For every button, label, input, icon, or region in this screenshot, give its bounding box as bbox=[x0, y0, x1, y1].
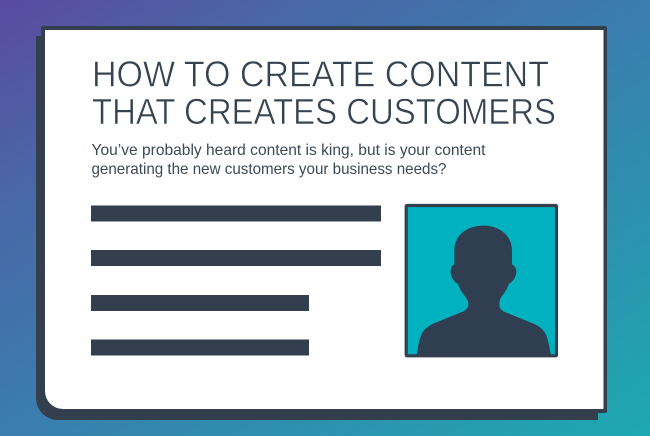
title bbox=[92, 54, 556, 132]
subtitle line 2: generating the new customers your business needs? bbox=[92, 161, 447, 178]
title line 2: THAT CREATES CUSTOMERS bbox=[92, 91, 556, 132]
subtitle line 1: You’ve probably heard content is king, but is your content bbox=[92, 142, 486, 159]
card border bbox=[41, 26, 607, 413]
subtitle bbox=[92, 142, 486, 178]
photo frame bbox=[406, 206, 556, 356]
bar 3 bbox=[91, 295, 309, 311]
title line 1: HOW TO CREATE CONTENT bbox=[92, 54, 549, 94]
bar 2 bbox=[91, 250, 381, 266]
card panel bbox=[41, 26, 607, 413]
profile photo bbox=[406, 206, 556, 356]
bar 4 bbox=[91, 340, 309, 356]
card drop shadow bbox=[36, 36, 598, 420]
bar 1 bbox=[91, 206, 381, 222]
placeholder text bars bbox=[91, 206, 381, 356]
icon: person silhouette bbox=[417, 226, 551, 355]
card white surface bbox=[45, 30, 604, 409]
